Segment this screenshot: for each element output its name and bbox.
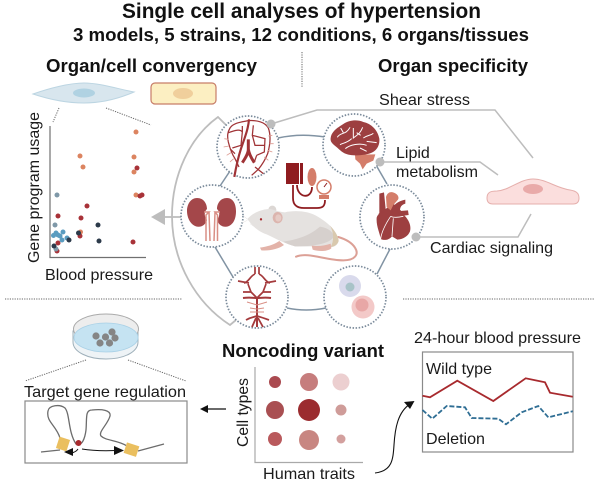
connector: cardiac signaling xyxy=(412,214,531,242)
heading: organ/cell convergency: Organ/cell convergency xyxy=(46,55,258,76)
icon: yellow cardiomyocyte cell xyxy=(151,83,216,104)
y axis label: cell types: Cell types xyxy=(235,378,252,447)
organ: brain (top right) xyxy=(323,114,385,176)
icon: petri dish xyxy=(73,314,138,359)
label: lipid metabolism: Lipid xyxy=(396,145,430,162)
icon: blood pressure cuff xyxy=(286,163,331,208)
x axis label: Blood pressure xyxy=(45,267,153,284)
organ: brain arteries (bottom left) xyxy=(226,266,288,328)
gray-blue points xyxy=(52,192,60,252)
dark points xyxy=(52,222,102,248)
panel: blood pressure line chart xyxy=(422,352,573,452)
central organ ring connectors xyxy=(215,135,390,310)
scatter axes xyxy=(50,126,146,258)
arrow: organs to scatter plot xyxy=(151,209,181,225)
red points xyxy=(54,166,144,254)
label: cardiac signaling: Cardiac signaling xyxy=(430,240,553,257)
icon: mouse xyxy=(242,206,357,260)
title: Single cell analyses of hypertension xyxy=(122,0,481,23)
label: deletion: Deletion xyxy=(426,431,485,448)
organ: heart (right) xyxy=(360,185,424,249)
heading: 24-hour blood pressure: 24-hour blood pressure xyxy=(414,330,581,347)
curved arrow: variant to blood pressure xyxy=(375,401,414,473)
panel: gene program scatter plot xyxy=(26,83,216,284)
panel: target gene regulation diagram xyxy=(25,401,187,463)
heading: organ specificity: Organ specificity xyxy=(378,55,529,76)
icon: pink endothelial cell xyxy=(487,179,579,204)
organ: kidneys (left) xyxy=(181,185,243,247)
icon: blue fibroblast cell xyxy=(33,83,134,103)
deletion line xyxy=(422,406,573,424)
arrow: variant to gene regulation xyxy=(200,405,226,413)
connector: shear stress xyxy=(266,110,533,158)
heading: noncoding variant: Noncoding variant xyxy=(222,340,384,361)
y axis label: Gene program usage xyxy=(26,112,43,263)
label: shear stress: Shear stress xyxy=(379,92,470,109)
heading: target gene regulation: Target gene regulation xyxy=(24,384,186,401)
organ: immune and blood cells (bottom right) xyxy=(324,266,386,328)
subtitle: 3 models, 5 strains, 12 conditions, 6 organs/tissues xyxy=(73,24,529,45)
blue points xyxy=(51,230,70,242)
label: lipid metabolism xyxy=(396,145,478,181)
label: lipid metabolism: metabolism xyxy=(396,164,478,181)
label: wild type: Wild type xyxy=(426,361,492,378)
wild type line xyxy=(422,378,573,401)
organ: arteries (top left) xyxy=(217,116,279,178)
dot matrix chart xyxy=(235,367,363,482)
outer convergence arc xyxy=(172,117,236,325)
orange points xyxy=(78,130,138,234)
connector: lipid metabolism xyxy=(376,158,498,175)
